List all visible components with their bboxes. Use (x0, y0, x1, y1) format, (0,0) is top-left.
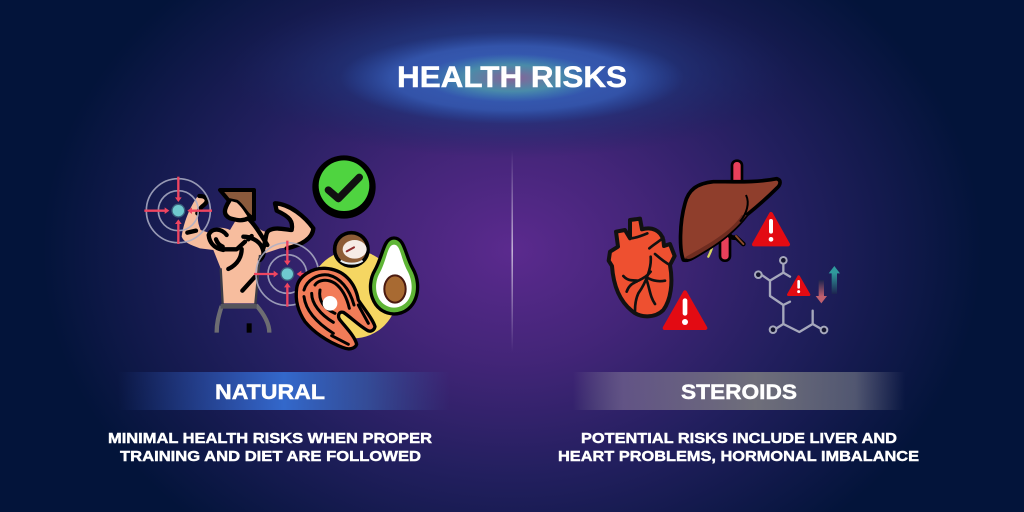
natural label bar (118, 372, 450, 410)
natural description: MINIMAL HEALTH RISKS WHEN PROPER (108, 430, 432, 447)
icon: small warning triangle (788, 277, 809, 295)
steroids label bar (573, 372, 905, 410)
steroids heading: STEROIDS (681, 381, 797, 404)
steroids description (558, 430, 919, 465)
natural description (108, 430, 432, 465)
center divider (512, 150, 513, 352)
icon: warning triangle on liver (754, 214, 788, 244)
icon: bodybuilder (182, 190, 313, 333)
illustration: natural physique (144, 155, 418, 349)
panel: natural (108, 372, 450, 465)
steroids description: HEART PROBLEMS, HORMONAL IMBALANCE (558, 448, 919, 465)
icon: target marker on arm (144, 177, 212, 244)
icon: molecule (755, 257, 827, 333)
icon: yellow plate (309, 250, 397, 338)
icon: salmon steak (296, 268, 375, 349)
icon: blood vessel (720, 161, 742, 261)
icon: avocado (370, 238, 418, 314)
natural description: TRAINING AND DIET ARE FOLLOWED (120, 448, 421, 465)
icon: green check badge (312, 155, 376, 219)
icon: nut (335, 233, 368, 266)
title: HEALTH RISKS (397, 61, 627, 94)
title glow (227, 0, 797, 158)
icon: heart (609, 219, 675, 316)
steroids description: POTENTIAL RISKS INCLUDE LIVER AND (581, 430, 897, 447)
illustration: steroid organ damage (609, 161, 840, 333)
natural heading: NATURAL (215, 381, 325, 404)
icon: target marker on torso (254, 241, 319, 307)
icon: liver (681, 179, 780, 260)
icon: hormone arrows (816, 266, 840, 303)
panel: steroids (558, 372, 919, 465)
icon: warning triangle on heart (665, 292, 705, 328)
